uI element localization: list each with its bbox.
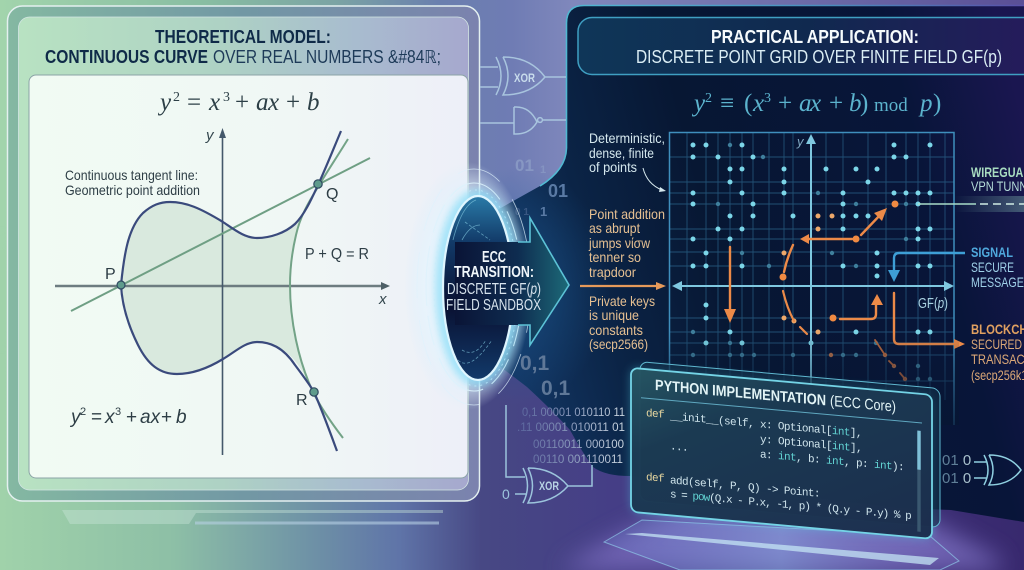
binary digits upper: 1 (540, 164, 546, 176)
logic gate: bottom XOR: 0 (502, 486, 510, 502)
chart: elliptic curve over real numbers (55, 127, 390, 455)
logic gate: NAND (480, 107, 566, 134)
header: practical application (578, 18, 1024, 74)
annotation: deterministic: dense, finite (589, 145, 654, 161)
inner frame (18, 17, 468, 490)
code block: add(self, P, Q) -> Point: (670, 475, 820, 501)
point Q (314, 180, 338, 203)
arrow text: TRANSITION: (454, 264, 534, 281)
shaded area under curve (121, 202, 313, 392)
logic gate: top XOR (480, 57, 566, 95)
panel glow (631, 368, 932, 539)
equation: modular curve: 2 (705, 91, 712, 106)
annotation: point addition (588, 206, 665, 280)
equation: real curve: a (256, 89, 268, 116)
logic gate: top XOR: XOR (514, 71, 535, 85)
annotation: tangent line (65, 167, 200, 198)
annotation: tangent line: Continuous tangent line: (65, 167, 198, 183)
equation: modular curve: ) (933, 90, 941, 117)
panel title: PYTHON IMPLEMENTATION (655, 377, 826, 409)
axis labels: x (378, 291, 387, 308)
green curve branch (290, 139, 348, 438)
code block: s = pow(Q.x - P.x, -1, p) * (Q.y - P.y) % p (670, 489, 911, 523)
portal opening (443, 196, 513, 380)
formula bottom left: + (126, 407, 137, 428)
python base platform (604, 520, 959, 570)
equation: modular curve: x (752, 90, 764, 117)
binary digits upper: 01 (515, 156, 534, 175)
equation: real curve: 3 (223, 90, 230, 105)
binary stream: 0,1 00001 010110 11 (522, 405, 625, 419)
point R: R (296, 392, 308, 409)
equation: modular curve: ≡ (720, 90, 734, 117)
heading: theoretical model: THEORETICAL MODEL: (155, 27, 331, 47)
arrow text: ECC (482, 249, 506, 266)
equation: modular curve: 3 (764, 91, 771, 106)
annotation: tangent line: Geometric point addition (65, 182, 200, 198)
binary digits upper: 0 1 (515, 207, 529, 218)
annotation: deterministic: Deterministic, (589, 130, 665, 146)
portal rings (417, 169, 531, 405)
formula bottom left: ax (140, 407, 162, 428)
binary stream: .11 00001 010011 01 (517, 420, 625, 434)
binary digits: 0,1 (520, 352, 571, 400)
equation: modular curve: mod (874, 95, 908, 116)
equation: real curve: b (307, 89, 320, 116)
back pane (640, 362, 940, 528)
equation: real curve: + (286, 89, 300, 116)
panel: theoretical model (8, 6, 480, 501)
arrow: deterministic to grid (643, 168, 666, 192)
code block: a: int, b: int, p: int): (760, 449, 904, 474)
tangent line (71, 158, 370, 311)
code block: __init__(self, x: Optional[int], (669, 411, 862, 441)
code block: y: Optional[int], (760, 434, 862, 456)
binary digits upper: 1 (540, 204, 547, 219)
annotation: point addition: as abrupt (589, 220, 640, 236)
annotation: private keys: constants (589, 322, 643, 338)
binary digits upper (515, 156, 568, 219)
y axis (810, 142, 812, 420)
equation: modular curve: a (799, 90, 812, 117)
formula bottom left: + (161, 407, 172, 428)
formula bottom left: 2 (80, 406, 86, 418)
equation: modular curve: x (809, 90, 821, 117)
binary stream (517, 405, 625, 466)
logic gate: bottom XOR: XOR (539, 479, 559, 493)
code block: ... (670, 441, 688, 455)
orange arrowheads (724, 208, 965, 349)
x axis (678, 285, 948, 287)
outer frame (8, 6, 480, 501)
label: signal (971, 244, 1024, 290)
equation: modular curve: ) (860, 90, 868, 117)
formula bottom left: b (176, 407, 187, 428)
y axis (222, 136, 224, 455)
label: blockchain (971, 321, 1024, 383)
annotation: private keys (589, 293, 655, 352)
binary stream: 00110 001110011 (533, 452, 623, 466)
point R (296, 388, 318, 409)
logic gate: right XOR (942, 452, 1021, 487)
equation: real curve: x (267, 89, 279, 116)
annotation: P + Q = R: P + Q = R (305, 246, 369, 263)
annotation: point addition: trapdoor (589, 264, 636, 280)
logic gate: right XOR: 01 0 (942, 470, 971, 487)
code block: def (646, 408, 664, 422)
annotation: deterministic (589, 130, 665, 175)
arrow: signal connector (888, 253, 965, 282)
grid lines (670, 132, 954, 400)
equation: modular curve: y (691, 90, 706, 117)
axis labels: y (796, 134, 805, 149)
equation: modular curve: p (918, 90, 932, 117)
logic gate: bottom XOR (502, 405, 592, 503)
equation: modular curve: + (829, 90, 843, 117)
heading: theoretical model: OVER REAL NUMBERS &#84ℝ; (213, 47, 441, 67)
chart: discrete point grid: GF(p) (918, 295, 948, 312)
logic gate: right XOR: 01 0 (942, 452, 971, 469)
white chart card (29, 75, 468, 478)
formula bottom left: y (69, 407, 82, 428)
orange point-addition paths (730, 213, 957, 379)
equation: modular curve: b (849, 90, 862, 117)
navy curve (121, 131, 341, 451)
grid fade (664, 330, 959, 425)
annotation: point addition: Point addition (589, 206, 665, 222)
equation: modular curve: + (778, 90, 792, 117)
arrow: orange connector from transition (580, 282, 666, 290)
panel: python implementation (631, 361, 940, 540)
formula bottom left: = (91, 407, 102, 428)
point Q: Q (326, 186, 338, 203)
equation: real curve: = (187, 89, 201, 116)
decorative base under left panel (62, 510, 443, 524)
glass pane (631, 368, 932, 539)
equation: real curve: 2 (173, 90, 180, 105)
annotation: deterministic: of points (589, 159, 637, 175)
equation: modular curve: ( (744, 90, 752, 117)
heading: theoretical model (45, 27, 441, 67)
portal ring glow (441, 195, 515, 381)
label: wireguard (971, 164, 1024, 194)
annotation: private keys: (secp2566) (589, 336, 648, 352)
header: practical application: PRACTICAL APPLICATION: (711, 27, 919, 47)
equation: real curve: + (235, 89, 249, 116)
portal halo (404, 162, 532, 410)
arrow text: DISCRETE GF(p) (447, 281, 541, 298)
binary digits: 0,1: 0,1 (541, 377, 571, 400)
portal inner arcs (453, 200, 492, 363)
annotation: private keys: is unique (589, 307, 639, 323)
x axis (55, 285, 385, 287)
code block (646, 408, 911, 523)
connector: wireguard tunnel (918, 196, 1024, 212)
arrow text: FIELD SANDBOX (446, 297, 541, 314)
point P: P (105, 266, 116, 283)
code block: def (646, 472, 664, 486)
equation: real curve: x (208, 89, 220, 116)
axis labels: y (205, 127, 215, 144)
scrollbar (917, 431, 921, 532)
annotation: private keys: Private keys (589, 293, 655, 309)
arrow: ECC transition (446, 218, 569, 345)
grid frame (670, 132, 954, 425)
formula bottom left: 3 (115, 406, 121, 418)
panel title: (ECC Core) (830, 393, 896, 416)
equation: real curve: y (157, 89, 172, 116)
teal dots (693, 145, 930, 379)
point P (105, 266, 125, 289)
binary digits: 0,1: 0,1 (520, 352, 550, 375)
label: signal: SIGNAL (971, 244, 1013, 260)
annotation: point addition: jumps νίσw (588, 235, 651, 251)
panel: practical application background (430, 5, 1024, 522)
heading: theoretical model: CONTINUOUS CURVE (45, 47, 208, 67)
chart: discrete point grid (664, 132, 965, 425)
arrow text (446, 249, 541, 314)
annotation: point addition: tenner so (589, 249, 641, 265)
portal (404, 162, 532, 410)
binary digits upper: 01 (548, 181, 568, 201)
formula bottom left: x (104, 407, 116, 428)
axis labels (205, 127, 387, 308)
binary stream: 00110011 000100 (533, 437, 624, 451)
